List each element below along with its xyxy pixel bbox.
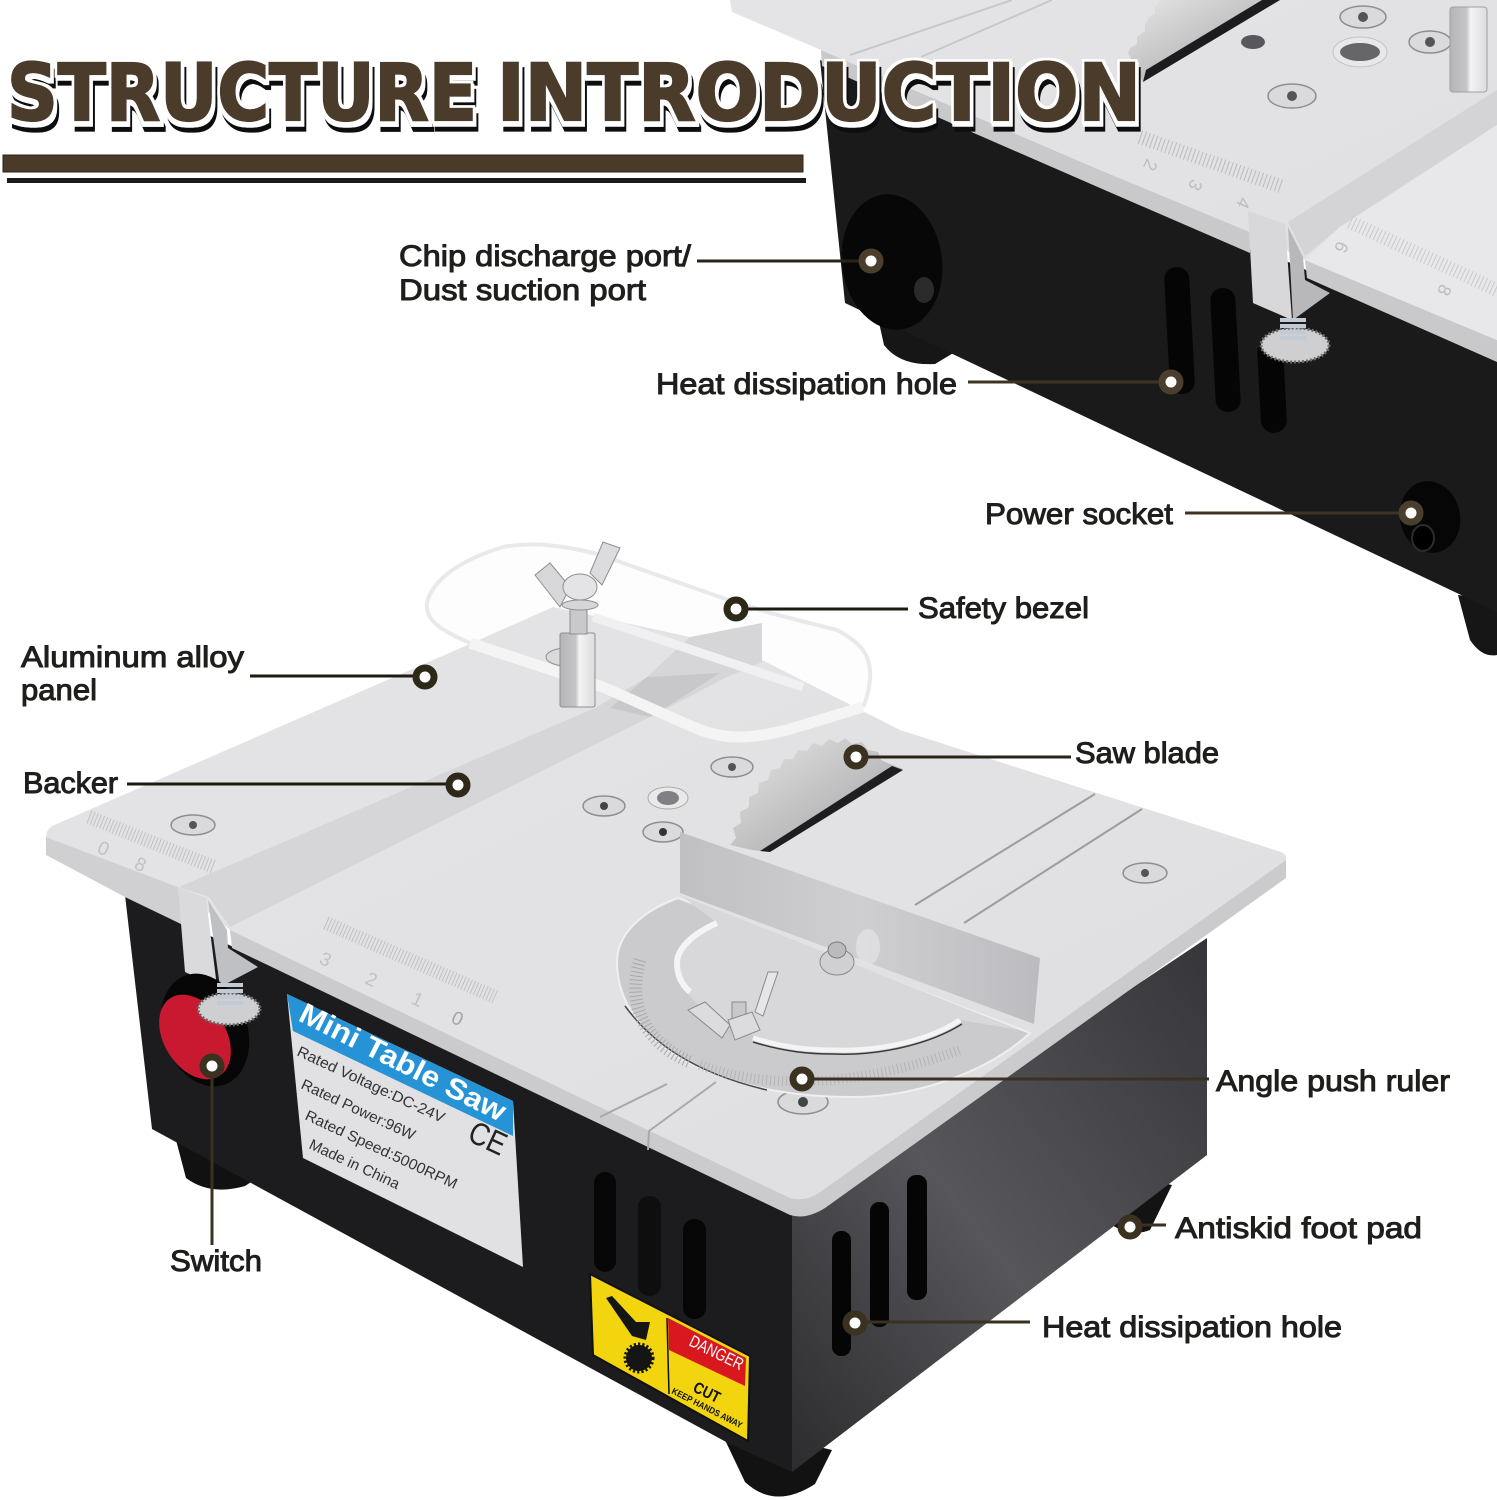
callout: aluminum alloy panel bbox=[21, 641, 434, 707]
power socket bbox=[1393, 476, 1467, 558]
backer rail: rear bbox=[1288, 90, 1497, 256]
leader bbox=[210, 1075, 214, 1245]
label second line: Dust suction port bbox=[399, 274, 647, 307]
label: Saw blade bbox=[1075, 737, 1219, 770]
ruler: rear right bbox=[1350, 222, 1497, 290]
icon: hand bbox=[606, 1296, 650, 1340]
ruler: front bbox=[326, 923, 495, 997]
ruler numbers bbox=[94, 837, 466, 1031]
label: Chip discharge port/ bbox=[399, 240, 692, 273]
switch housing bbox=[146, 961, 264, 1099]
marker bbox=[862, 252, 880, 270]
rated speed: Rated Speed:5000RPM bbox=[302, 1107, 460, 1193]
marker bbox=[203, 1057, 221, 1075]
label: Safety bezel bbox=[918, 592, 1089, 625]
ruler numbers: 8 bbox=[131, 853, 149, 877]
ruler numbers: rear: 2 bbox=[1139, 156, 1162, 174]
standoff post: rear bbox=[1450, 7, 1487, 92]
ruler numbers: 2 bbox=[362, 968, 380, 992]
vent slots: front bbox=[594, 1172, 706, 1319]
blade slot: rear bbox=[1143, 0, 1280, 82]
leader bbox=[745, 608, 908, 610]
label title: Mini Table Saw bbox=[294, 998, 511, 1128]
callout: backer bbox=[23, 767, 467, 800]
ruler numbers: 0 bbox=[94, 837, 112, 861]
leader bbox=[811, 1078, 1209, 1080]
sticker divider bbox=[667, 1318, 669, 1394]
saw blade: rear bbox=[1128, 0, 1280, 82]
callout: safety bezel bbox=[727, 592, 1089, 625]
foot: front bbox=[725, 1440, 832, 1497]
marker bbox=[416, 668, 434, 686]
cut text: CUT bbox=[690, 1379, 723, 1407]
marker bbox=[1121, 1218, 1139, 1236]
safety bezel: acrylic oval bbox=[427, 544, 870, 707]
callout: heat dissipation hole rear bbox=[656, 368, 1180, 401]
red rocker switch bbox=[144, 982, 246, 1092]
blade slot bbox=[760, 766, 903, 852]
rated voltage: Rated Voltage:DC-24V bbox=[294, 1043, 447, 1127]
vent slots: rear bbox=[1164, 266, 1287, 434]
vent slots: side bbox=[832, 1175, 927, 1356]
saw blade bbox=[730, 738, 903, 852]
fence bracket facet bbox=[208, 900, 258, 987]
foot: rear right bbox=[1458, 595, 1497, 655]
marker bbox=[1402, 504, 1420, 522]
marker bbox=[1162, 373, 1180, 391]
ruler numbers: rear: 3 bbox=[1184, 176, 1207, 194]
danger warning sticker bbox=[590, 1274, 750, 1441]
marker bbox=[793, 1070, 811, 1088]
keep hands away text: KEEP HANDS AWAY bbox=[670, 1386, 744, 1430]
leader bbox=[1185, 512, 1402, 514]
leader bbox=[250, 674, 416, 678]
protractor bbox=[617, 895, 1030, 1097]
ruler numbers: 0 bbox=[448, 1007, 466, 1031]
table edge: right piece bbox=[1305, 260, 1497, 362]
wing bolt on bezel bbox=[535, 542, 620, 707]
leader bbox=[968, 380, 1162, 384]
marker bbox=[727, 600, 745, 618]
sticker red band bbox=[668, 1318, 746, 1386]
right table plate bbox=[1305, 125, 1497, 340]
leader bbox=[1139, 1224, 1166, 1226]
leader bbox=[865, 756, 1071, 758]
rated power: Rated Power:96W bbox=[298, 1076, 419, 1144]
callout: saw blade bbox=[847, 737, 1219, 770]
machine body: rear bbox=[820, 60, 1497, 612]
label: Angle push ruler bbox=[1216, 1065, 1450, 1098]
icon: saw blade bbox=[626, 1345, 652, 1371]
angle fence bbox=[680, 832, 1040, 1024]
table rails bbox=[850, 0, 1052, 57]
foot: rear left bbox=[878, 318, 955, 364]
product photo: close-up of table saw rear bbox=[730, 0, 1497, 655]
table screws: rear bbox=[1241, 6, 1451, 108]
slot rails left bbox=[600, 1082, 716, 1150]
ruler: left bbox=[89, 817, 214, 867]
ruler numbers: rear: 8 bbox=[1433, 281, 1456, 299]
slot rails right bbox=[915, 794, 1142, 923]
made in: Made in China bbox=[306, 1136, 403, 1193]
label: Antiskid foot pad bbox=[1175, 1212, 1422, 1245]
fence bracket facet: rear bbox=[1288, 227, 1330, 320]
ruler numbers: rear: 4 bbox=[1232, 194, 1255, 212]
aluminum table top bbox=[46, 607, 1286, 1199]
fence highlight bbox=[856, 929, 880, 965]
callout: switch bbox=[170, 1057, 262, 1278]
label: Backer bbox=[23, 767, 118, 800]
callout: angle push ruler bbox=[793, 1065, 1450, 1098]
label second line: panel bbox=[21, 674, 97, 707]
CE mark: CE bbox=[463, 1114, 513, 1162]
label: Switch bbox=[170, 1245, 262, 1278]
title: INTRODUCTION bbox=[497, 49, 1141, 139]
dust port bbox=[833, 188, 951, 336]
title: STRUCTURE bbox=[7, 49, 477, 139]
foot: left bbox=[176, 1140, 262, 1190]
ruler numbers: rear: 6 bbox=[1330, 238, 1353, 256]
bezel band over table bbox=[470, 643, 863, 737]
table edge: left piece bbox=[821, 50, 1250, 253]
table screws bbox=[171, 648, 1167, 1114]
leader bbox=[864, 1320, 1030, 1324]
bezel inner slot bbox=[593, 617, 803, 687]
leader bbox=[697, 260, 862, 262]
marker bbox=[847, 748, 865, 766]
title bbox=[7, 49, 1141, 139]
protractor wing nut bbox=[688, 972, 778, 1040]
leader bbox=[127, 782, 449, 786]
backer darker tip bbox=[610, 673, 720, 717]
silver table top: rear bbox=[730, 0, 1497, 340]
danger text: DANGER bbox=[686, 1332, 747, 1374]
thumb screw bbox=[198, 983, 260, 1025]
thumb screw: rear bbox=[1261, 318, 1329, 362]
callout: antiskid foot pad bbox=[1121, 1212, 1422, 1245]
label: Heat dissipation hole bbox=[656, 368, 957, 401]
fence bracket bbox=[178, 887, 217, 987]
label: Heat dissipation hole bbox=[1042, 1311, 1342, 1344]
foot: right bbox=[1100, 1180, 1172, 1233]
table edge: front piece bbox=[230, 860, 1286, 1216]
ruler numbers: 3 bbox=[316, 948, 334, 972]
marker bbox=[846, 1314, 864, 1332]
product photo: front view of mini table saw bbox=[46, 542, 1286, 1497]
callout: power socket bbox=[985, 498, 1420, 531]
label blue band bbox=[287, 994, 513, 1136]
backer rail bbox=[179, 623, 762, 927]
label: Power socket bbox=[985, 498, 1174, 531]
machine body: front side bbox=[125, 895, 792, 1472]
marker bbox=[449, 776, 467, 794]
ruler: rear left bbox=[1140, 137, 1283, 187]
callout: chip discharge port bbox=[399, 240, 880, 307]
table edge: left piece bbox=[46, 837, 183, 925]
label: Aluminum alloy bbox=[21, 641, 244, 674]
title underline bbox=[3, 155, 806, 183]
product rating label bbox=[287, 994, 523, 1267]
ruler numbers: rear bbox=[1139, 156, 1456, 299]
fence bracket: rear bbox=[1248, 211, 1292, 320]
ruler numbers: 1 bbox=[408, 988, 426, 1012]
fence nut bbox=[820, 942, 854, 975]
callout: heat dissipation hole front bbox=[846, 1311, 1342, 1344]
machine body: right side bbox=[792, 938, 1207, 1472]
